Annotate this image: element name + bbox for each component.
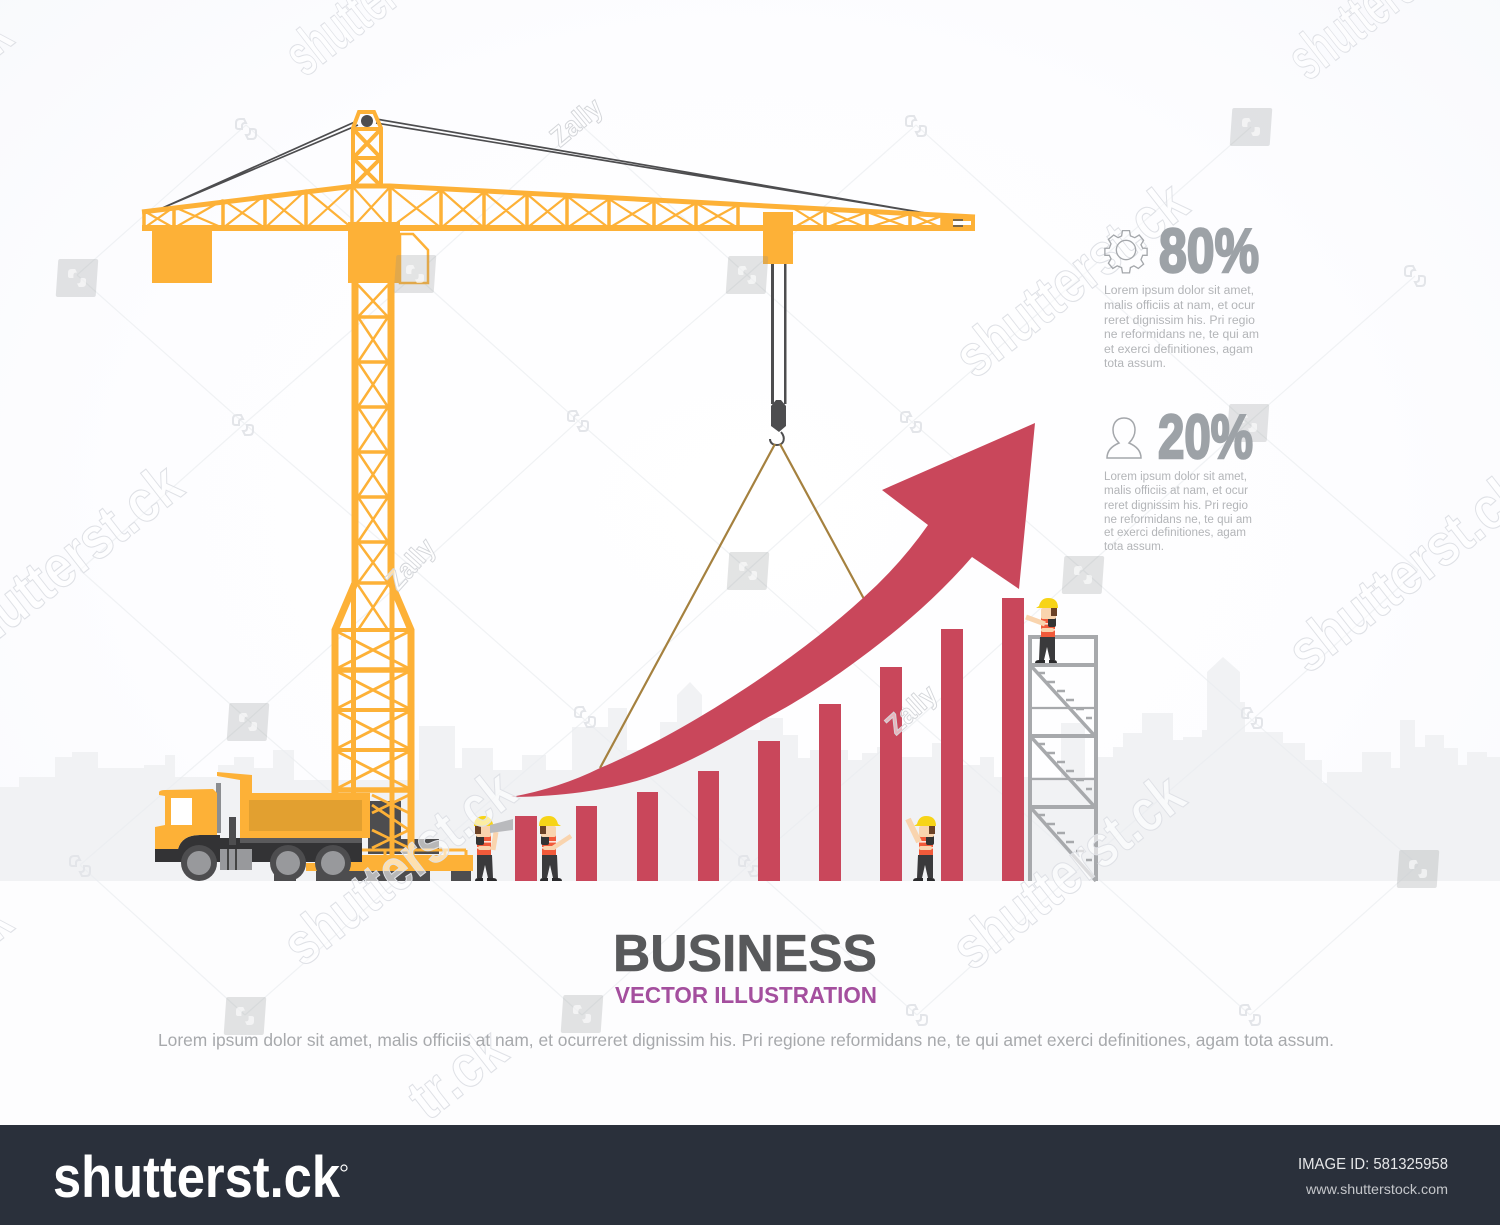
registered mark	[341, 1165, 347, 1171]
watermark text: shutterst.ck	[270, 756, 528, 978]
20% description: reret dignissim his. Pri regio	[1104, 500, 1248, 512]
20% value: 20%	[1158, 403, 1253, 472]
icon: person	[1107, 418, 1141, 458]
20% description: ne reformidans ne, te qui am	[1104, 514, 1252, 526]
trolley	[763, 212, 793, 264]
80% description: Lorem ipsum dolor sit amet,	[1104, 285, 1254, 297]
truck chassis	[155, 835, 362, 862]
shutterstock logo: shutterst.ck	[53, 1145, 341, 1210]
lifting ropes	[600, 444, 864, 768]
80% description	[1104, 285, 1259, 370]
watermark credit text: Zally	[879, 678, 943, 740]
worker at bar	[908, 816, 936, 881]
subtitle: VECTOR ILLUSTRATION	[615, 982, 877, 1008]
stat: 80%	[1104, 217, 1259, 370]
footer bar	[0, 1125, 1500, 1225]
80% value: 80%	[1159, 217, 1259, 286]
worker with megaphone	[474, 816, 513, 881]
watermark credit text: Zally	[544, 91, 609, 153]
city skyline silhouette	[0, 657, 1500, 881]
20% description: malis officiis at nam, et ocur	[1104, 485, 1248, 497]
watermark credit text: Zally	[379, 532, 442, 596]
image id: IMAGE ID: 581325958	[1298, 1156, 1448, 1173]
20% description: Lorem ipsum dolor sit amet,	[1104, 471, 1247, 483]
title: BUSINESS	[613, 925, 877, 983]
jib end block	[942, 215, 975, 231]
crane support cables	[160, 119, 925, 213]
operator cab	[348, 222, 428, 283]
watermark text: shutterst.ck	[942, 168, 1200, 390]
truck exhaust	[216, 783, 221, 833]
20% description: tota assum.	[1104, 541, 1164, 553]
80% description: tota assum.	[1104, 358, 1166, 370]
80% description: malis officiis at nam, et ocur	[1104, 300, 1255, 312]
crane jib	[142, 186, 975, 228]
20% description: et exerci definitiones, agam	[1104, 527, 1246, 539]
watermark text: tr.ck	[395, 1014, 519, 1132]
crane mast	[335, 283, 411, 855]
crane dark machinery blocks	[368, 801, 439, 854]
bar chart	[515, 598, 1024, 881]
watermark tiles	[56, 108, 1439, 1035]
dump truck	[155, 772, 370, 881]
worker on scaffold	[1026, 598, 1058, 663]
80% description: et exerci definitiones, agam	[1104, 344, 1253, 356]
worker pointing	[539, 816, 571, 881]
crane base	[274, 850, 473, 881]
ground	[0, 881, 1500, 1125]
80% description: reret dignissim his. Pri regio	[1104, 315, 1255, 327]
website: www.shutterstock.com	[1305, 1181, 1448, 1197]
watermark text: shutterst.ck	[939, 760, 1197, 982]
scaffold	[1030, 637, 1096, 881]
crane top mast	[353, 112, 381, 186]
growth arrow	[511, 423, 1035, 797]
crane	[142, 112, 975, 855]
truck dump body	[217, 772, 370, 838]
20% description	[1104, 471, 1252, 553]
hoist cables and hook	[770, 264, 786, 445]
counterweight	[152, 230, 212, 283]
watermark credit text	[379, 91, 943, 740]
icon: gear	[1105, 231, 1147, 273]
truck wheels	[181, 845, 351, 881]
description: Lorem ipsum dolor sit amet, malis officiis at nam, et ocurreret dignissim his. Pri regione reformidans ne, te qui amet exerci definitiones, agam tota assum.	[158, 1030, 1334, 1050]
stat: 20%	[1104, 403, 1253, 553]
watermark logo marks	[70, 116, 1425, 1025]
truck cab	[155, 789, 217, 849]
80% description: ne reformidans ne, te qui am	[1104, 329, 1259, 341]
